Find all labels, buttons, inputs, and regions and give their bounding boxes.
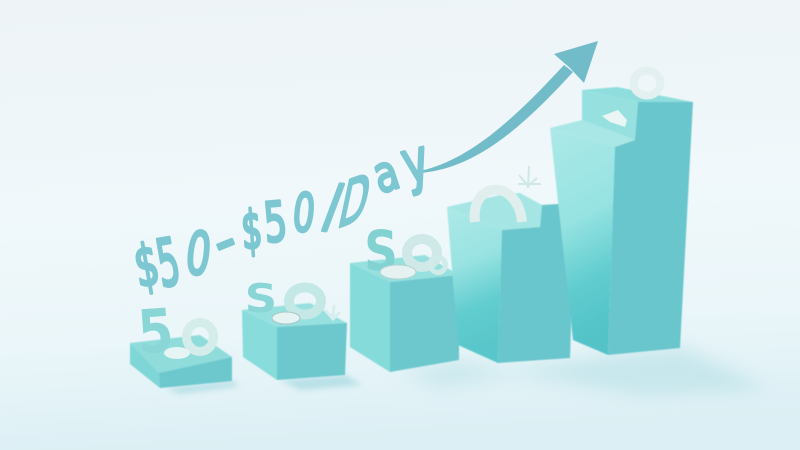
title: $50-$150 /Day: -: [201, 204, 248, 278]
icon: dollar and coin on block 1: [135, 296, 214, 368]
icon: dollar and coin on block 2: [245, 276, 340, 324]
arrow: [420, 41, 598, 173]
block 4: [447, 193, 575, 363]
icon: dollar and coin on block 3: S: [364, 220, 398, 284]
icon: dollar and coin on block 2: S: [245, 276, 277, 321]
block 5: [550, 87, 693, 355]
title: $50-$150 /Day: $: [129, 232, 164, 301]
icon: dollar and coin on block 1: 5: [135, 296, 176, 368]
title: $50-$150 /Day: y: [395, 126, 436, 198]
title: $50-$150 /Day: D: [333, 158, 377, 244]
icon: dollar and coin on block 3: [364, 220, 446, 284]
title: $50-$150 /Day: $: [239, 199, 264, 262]
title: $50-$150 /Day: [129, 126, 436, 303]
title: $50-$150 /Day: 0: [182, 218, 215, 290]
title: $50-$150 /Day: a: [366, 144, 406, 205]
title: $50-$150 /Day: /: [321, 170, 346, 241]
title: $50-$150 /Day: 5: [151, 225, 186, 303]
title: $50-$150 /Day: 5: [261, 189, 290, 255]
block 3: [350, 255, 459, 372]
icon: arc and spark on block 4: [475, 166, 541, 222]
icon: coins on block 5: [602, 70, 660, 127]
block 1: [130, 335, 232, 388]
title: $50-$150 /Day: 0: [290, 183, 318, 245]
floor shadows: [165, 347, 770, 395]
block 2: [242, 303, 347, 380]
